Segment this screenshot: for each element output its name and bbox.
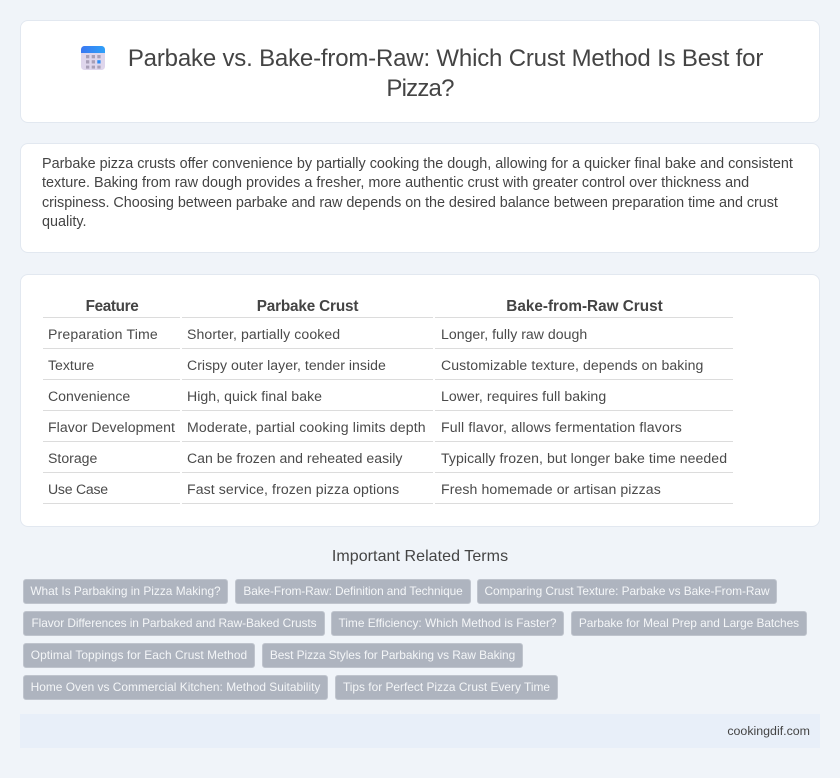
text block: intro: quality. xyxy=(42,214,87,230)
row: convenience: High, quick final bake xyxy=(187,388,322,404)
row: use case xyxy=(48,481,661,497)
table header: Feature xyxy=(86,298,138,315)
row: preparation time xyxy=(48,326,587,342)
tag: Optimal Toppings for Each Crust Method xyxy=(31,648,247,662)
row: texture: Crispy outer layer, tender inside xyxy=(187,357,386,373)
tag xyxy=(477,579,777,604)
row: texture: Texture xyxy=(48,357,94,373)
tag xyxy=(23,675,328,700)
tag: Tips for Perfect Pizza Crust Every Time xyxy=(343,680,550,694)
row: use case: Fast service, frozen pizza options xyxy=(187,481,399,497)
text block: intro: texture. Baking from raw dough provides a fresher, more authentic crust with greater control over thickness and xyxy=(42,175,749,191)
header card xyxy=(20,20,820,123)
tag: Home Oven vs Commercial Kitchen: Method Suitability xyxy=(31,680,320,694)
table header: Bake-from-Raw Crust xyxy=(506,298,663,315)
row: storage: Storage xyxy=(48,450,97,466)
tag: Parbake for Meal Prep and Large Batches xyxy=(579,616,799,630)
row: preparation time: Shorter, partially cooked xyxy=(187,326,340,342)
table header: Parbake Crust xyxy=(257,298,358,315)
footer source: cookingdif.com xyxy=(727,724,810,738)
tag xyxy=(331,611,564,636)
row: storage: Typically frozen, but longer bake time needed xyxy=(441,450,727,466)
row: storage: Can be frozen and reheated easily xyxy=(187,450,402,466)
title: Pizza? xyxy=(386,75,454,102)
panel: intro paragraph xyxy=(20,143,820,253)
footer xyxy=(20,714,820,748)
row: flavor development: Full flavor, allows fermentation flavors xyxy=(441,419,682,435)
row: preparation time: Preparation Time xyxy=(48,326,158,342)
row: texture xyxy=(48,357,703,373)
tag xyxy=(23,611,325,636)
tag xyxy=(23,579,228,604)
tag xyxy=(571,611,807,636)
row: use case: Use Case xyxy=(48,481,108,497)
tag: Time Efficiency: Which Method is Faster? xyxy=(338,616,557,630)
row: flavor development: Flavor Development xyxy=(48,419,175,435)
tag: Bake-From-Raw: Definition and Technique xyxy=(243,584,463,598)
tag xyxy=(262,643,523,668)
row: preparation time: Longer, fully raw dough xyxy=(441,326,587,342)
tag xyxy=(23,643,255,668)
text block: intro xyxy=(42,156,793,230)
row: convenience xyxy=(48,388,606,404)
tag: Comparing Crust Texture: Parbake vs Bake-From-Raw xyxy=(485,584,769,598)
tag list xyxy=(23,579,807,700)
icon: calendar xyxy=(81,46,105,70)
heading: related terms: Important Related Terms xyxy=(332,548,508,565)
panel: comparison table xyxy=(20,274,820,527)
row: flavor development xyxy=(48,419,682,435)
tag: Flavor Differences in Parbaked and Raw-Baked Crusts xyxy=(31,616,317,630)
text block: intro: Parbake pizza crusts offer convenience by partially cooking the dough, allowing for a quicker final bake and consistent xyxy=(42,156,793,172)
tag: Best Pizza Styles for Parbaking vs Raw Baking xyxy=(270,648,515,662)
tag xyxy=(235,579,471,604)
title: Parbake vs. Bake-from-Raw: Which Crust Method Is Best for xyxy=(128,45,763,72)
title xyxy=(128,45,763,102)
row: flavor development: Moderate, partial cooking limits depth xyxy=(187,419,426,435)
row: convenience: Lower, requires full baking xyxy=(441,388,606,404)
tag: What Is Parbaking in Pizza Making? xyxy=(30,584,221,598)
row: convenience: Convenience xyxy=(48,388,130,404)
table header xyxy=(86,298,663,315)
text block: intro: crispiness. Choosing between parbake and raw depends on the desired balance between preparation time and crust xyxy=(42,195,778,211)
row: use case: Fresh homemade or artisan pizzas xyxy=(441,481,661,497)
row: storage xyxy=(48,450,727,466)
row: texture: Customizable texture, depends on baking xyxy=(441,357,703,373)
tag xyxy=(335,675,558,700)
